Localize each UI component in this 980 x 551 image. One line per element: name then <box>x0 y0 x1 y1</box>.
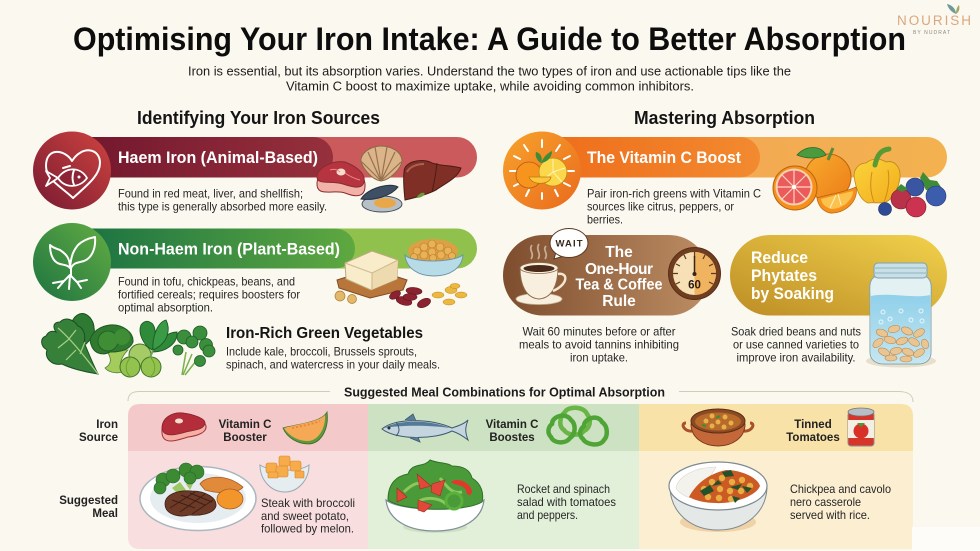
label: iron source <box>79 419 118 444</box>
icon: tomato can <box>848 408 874 446</box>
icon: orange <box>797 147 851 200</box>
logo: Nourish by Nudrat <box>897 4 971 36</box>
icon: mackerel fish <box>382 414 468 442</box>
heading: tea and coffee rule: One-Hour <box>585 261 653 278</box>
text: salad description <box>517 483 616 522</box>
icon: kidney beans <box>388 287 432 310</box>
text: vitamin C description: berries. <box>587 214 623 226</box>
text: haem description <box>118 188 327 214</box>
icon: brussels sprouts <box>120 344 161 377</box>
text: haem description: this type is generally absorbed more easily. <box>118 200 327 214</box>
icon: scattered chickpeas <box>335 291 356 304</box>
text: tea rule description: meals to avoid tannins inhibiting <box>519 338 679 352</box>
text: vitamin C boostes <box>486 419 538 444</box>
icon: plate with steak, broccoli, sweet potato <box>140 463 256 530</box>
text: steak meal description: followed by melon. <box>261 522 354 536</box>
icon: chickpea bowl <box>405 239 463 276</box>
subtitle: Vitamin C boost to maximize uptake, while avoiding common inhibitors. <box>286 78 694 94</box>
table: meal combinations <box>128 404 913 549</box>
header bar: vitamin C <box>560 137 947 178</box>
icon: heart and fish <box>33 132 111 210</box>
icon: melon <box>283 412 327 444</box>
icon: liver <box>404 160 461 200</box>
text: non-haem description <box>118 276 300 314</box>
label: suggested meal <box>59 495 118 520</box>
text: phytates description: or use canned varieties to <box>733 338 859 352</box>
icon: salad bowl <box>386 460 484 533</box>
icon: berries <box>878 172 946 217</box>
text: vitamin C booster <box>219 419 271 444</box>
row labels <box>59 419 118 520</box>
header bar: haem iron <box>90 137 477 178</box>
text: steak meal description: Steak with broccoli <box>261 497 355 510</box>
title: Optimising Your Iron Intake: A Guide to Better Absorption <box>73 21 906 57</box>
icon: sprout <box>33 223 111 301</box>
text: vegetables description <box>226 346 440 372</box>
subtitle <box>188 64 791 94</box>
panel: green vegetables <box>42 313 440 377</box>
text: steak meal description <box>261 497 355 536</box>
icon: scallop shell <box>361 146 402 181</box>
icon: tofu on board <box>337 251 407 298</box>
icon: kale <box>42 313 98 374</box>
text: vegetables description: Include kale, broccoli, Brussels sprouts, <box>226 346 417 358</box>
text: vitamin C boostes: Boostes <box>489 432 535 444</box>
icon: melon bowl <box>260 456 309 492</box>
text: salad description: salad with tomatoes <box>517 496 616 509</box>
heading: Mastering Absorption: Mastering Absorption <box>634 108 815 128</box>
text: vitamin C boostes: Vitamin C <box>486 419 538 431</box>
text: tinned tomatoes: Tinned <box>794 419 832 431</box>
text: salad description: Rocket and spinach <box>517 483 610 496</box>
heading: iron-rich green vegetables: Iron-Rich Green Vegetables <box>226 325 423 342</box>
icon: mussel <box>361 185 402 212</box>
text: non-haem description: Found in tofu, chickpeas, beans, and <box>118 276 295 288</box>
icon: jar of soaking beans <box>866 263 936 368</box>
icon: watercress <box>173 326 215 375</box>
icon: steak <box>162 413 206 441</box>
header bar: non-haem iron <box>90 228 477 268</box>
text: tea rule description: iron uptake. <box>570 352 628 364</box>
icon: chickpea pot <box>683 409 753 446</box>
panel: vitamin C boost <box>503 132 947 226</box>
label: iron source: Iron <box>96 419 118 431</box>
icon: orange wedge <box>817 187 856 213</box>
text: tinned tomatoes: Tomatoes <box>786 432 840 444</box>
text: vitamin C description: Pair iron-rich greens with Vitamin C <box>587 188 761 200</box>
text: chickpea description: Chickpea and cavolo <box>790 483 891 496</box>
column: chickpea meal <box>639 404 913 549</box>
icon: grapefruit <box>773 166 817 210</box>
column: salad meal <box>368 404 639 549</box>
text: vitamin C booster: Booster <box>223 432 267 444</box>
icon: fortified cereal flakes <box>432 284 467 305</box>
heading: Identifying Your Iron Sources: Identifying Your Iron Sources <box>137 108 380 128</box>
panel: non-haem iron <box>33 223 477 314</box>
heading: reduce phytates by soaking <box>751 249 834 303</box>
label: suggested meal: Suggested <box>59 495 118 507</box>
text: vitamin C description <box>587 188 761 226</box>
header bar: vitamin C: The Vitamin C Boost <box>587 148 741 167</box>
text: chickpea description <box>790 483 891 522</box>
pill: phytates <box>730 235 947 316</box>
heading: reduce phytates by soaking: Reduce <box>751 249 808 267</box>
icon: 60-minute timer: 60 <box>688 280 701 292</box>
icon: WAIT speech bubble <box>550 228 588 259</box>
panel: tea and coffee rule <box>503 228 720 364</box>
text: vitamin C description: sources like citrus, peppers, or <box>587 200 734 214</box>
heading: suggested meal combinations: Suggested Meal Combinations for Optimal Absorption <box>344 384 665 400</box>
header bar: non-haem iron: Non-Haem Iron (Plant-Based) <box>118 240 340 258</box>
text: chickpea description: nero casserole <box>790 496 861 509</box>
text: salad description: and peppers. <box>517 509 578 522</box>
heading: reduce phytates by soaking: Phytates <box>751 267 817 285</box>
panel: soaking phytates <box>730 235 947 368</box>
text: haem description: Found in red meat, liver, and shellfish; <box>118 188 303 200</box>
icon: citrus with rays <box>503 132 581 210</box>
icon: WAIT speech bubble: WAIT <box>556 238 583 250</box>
text: tea rule description: Wait 60 minutes before or after <box>522 326 676 338</box>
column: steak meal <box>128 404 368 549</box>
heading: tea and coffee rule: Rule <box>602 293 636 310</box>
text: non-haem description: fortified cereals; requires boosters for <box>118 288 300 302</box>
text: phytates description <box>731 326 861 364</box>
panel: haem iron <box>33 132 477 214</box>
pill: tea rule <box>503 235 709 316</box>
icon: yellow pepper <box>854 149 900 203</box>
icon: curry and rice bowl <box>669 462 767 532</box>
subtitle: Iron is essential, but its absorption varies. Understand the two types of iron and use actionable tips like the <box>188 64 791 78</box>
text: non-haem description: optimal absorption. <box>118 302 213 314</box>
text: vegetables description: spinach, and watercress in your daily meals. <box>226 358 440 372</box>
icon: 60-minute timer <box>668 248 720 300</box>
heading: tea and coffee rule: Tea & Coffee <box>576 276 663 294</box>
text: vitamin C booster: Vitamin C <box>219 419 271 431</box>
heading: tea and coffee rule <box>576 244 663 310</box>
icon: fruits <box>773 147 946 217</box>
icon: green pepper rings <box>548 408 607 444</box>
text: tinned tomatoes <box>786 419 840 444</box>
icon: broccoli <box>90 325 133 373</box>
label: iron source: Source <box>79 432 118 444</box>
text: phytates description: improve iron availability. <box>736 352 856 364</box>
header bar: haem iron: Haem Iron (Animal-Based) <box>118 148 318 167</box>
heading: reduce phytates by soaking: by Soaking <box>751 285 834 303</box>
heading: tea and coffee rule: The <box>605 244 633 261</box>
text: phytates description: Soak dried beans and nuts <box>731 326 861 338</box>
label: suggested meal: Meal <box>92 508 118 520</box>
logo: Nourish by Nudrat: NOURISH <box>897 13 971 28</box>
icon: steak <box>317 162 365 196</box>
text: steak meal description: and sweet potato, <box>261 510 349 523</box>
icon: spinach <box>140 320 177 358</box>
text: chickpea description: served with rice. <box>790 509 870 522</box>
text: tea rule description <box>519 326 679 364</box>
icon: coffee cup <box>516 244 565 304</box>
logo: Nourish by Nudrat: BY NUDRAT <box>913 30 950 36</box>
